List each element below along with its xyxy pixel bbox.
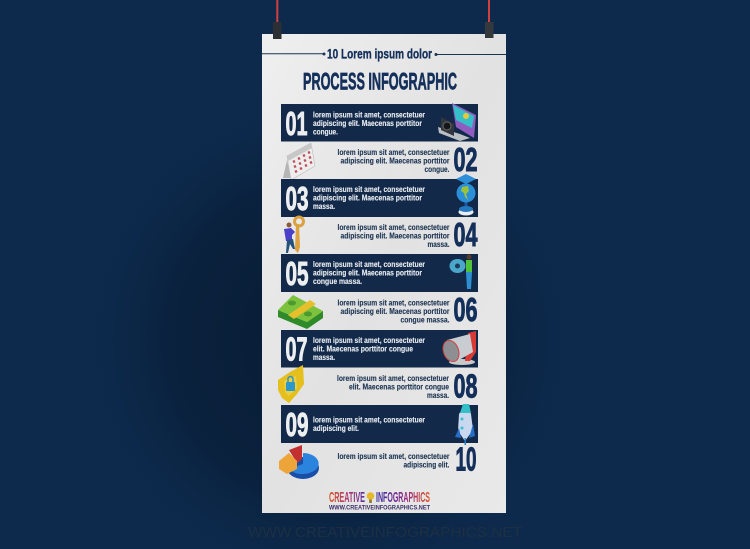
step 05: 05 — [286, 255, 308, 292]
step 09: 09 — [286, 406, 308, 443]
step 08: elit. Maecenas porttitor congue — [349, 382, 449, 392]
step 02: 02 — [454, 141, 478, 178]
step 01: congue. — [313, 128, 338, 136]
step 03: adipiscing elit. Maecenas porttitor — [313, 194, 422, 202]
step 07: massa. — [313, 353, 335, 362]
step 01: lorem ipsum sit amet, consectetuer — [313, 110, 425, 120]
step 03: 03 — [286, 180, 308, 217]
step 07: elit. Maecenas porttitor congue — [313, 344, 413, 354]
subtitle — [262, 46, 506, 62]
step 08 — [278, 365, 478, 404]
step 02 — [283, 141, 478, 180]
logo: CREATIVE — [329, 489, 365, 506]
step 07: 07 — [286, 330, 308, 368]
footer watermark: WWW.CREATIVEINFOGRAPHICS.NET — [248, 524, 522, 541]
step 07 — [281, 330, 478, 368]
hanging clips — [273, 0, 494, 39]
icon: shield with lock — [278, 365, 304, 403]
icon: pie chart — [279, 445, 319, 479]
step 04 — [284, 216, 478, 253]
step 06: lorem ipsum sit amet, consectetuer — [338, 298, 450, 308]
step 04: adipiscing elit. Maecenas porttitor — [340, 232, 450, 240]
step 06: 06 — [454, 291, 478, 328]
step 05: lorem ipsum sit amet, consectetuer — [313, 260, 425, 269]
icon: person with key — [284, 217, 304, 253]
icon: globe with graduation cap — [456, 174, 476, 216]
text: INFOGRAPHICS — [376, 489, 430, 506]
icon: megaphone — [440, 331, 476, 365]
subtitle: 10 Lorem ipsum dolor — [327, 46, 432, 62]
icon: light bulb — [367, 492, 374, 503]
step 02: lorem ipsum sit amet, consectetuer — [338, 148, 450, 157]
step 02: adipiscing elit. Maecenas porttitor — [340, 156, 450, 166]
title: PROCESS INFOGRAPHIC — [303, 68, 457, 96]
step 10: adipiscing elit. — [404, 460, 450, 470]
step 05: congue massa. — [313, 277, 362, 286]
icon: calendar — [283, 143, 315, 180]
step 01 — [281, 103, 478, 142]
icon: rocket — [455, 404, 475, 445]
logo: WWW.CREATIVEINFOGRAPHICS.NET — [329, 506, 430, 512]
icon: camera and picture — [438, 103, 476, 141]
poster sheet — [262, 34, 506, 513]
step 10: lorem ipsum sit amet, consectetuer — [338, 452, 450, 461]
step 10: 10 — [456, 440, 476, 478]
step 10 — [279, 440, 476, 479]
logo — [329, 489, 430, 512]
step 09: lorem ipsum sit amet, consectetuer — [313, 416, 425, 424]
step 07: lorem ipsum sit amet, consectetuer — [313, 336, 425, 345]
step 06 — [278, 291, 478, 329]
step 03 — [281, 174, 478, 217]
step 08: massa. — [427, 391, 449, 400]
step 04: massa. — [428, 240, 450, 249]
icon: stack of money — [278, 295, 323, 329]
step 09: adipiscing elit. — [313, 424, 359, 433]
icon: person with film reel — [450, 254, 472, 289]
step 08: 08 — [454, 368, 478, 404]
step 03: massa. — [313, 202, 335, 211]
step 09 — [281, 404, 478, 445]
step 03: lorem ipsum sit amet, consectetuer — [313, 185, 425, 194]
step 01: 01 — [286, 105, 308, 142]
step 05 — [281, 254, 478, 292]
step 01: adipiscing elit. Maecenas porttitor — [313, 119, 422, 128]
step 06: adipiscing elit. Maecenas porttitor — [340, 307, 450, 316]
step 06: congue massa. — [400, 316, 450, 324]
step 02: congue. — [424, 165, 450, 174]
step 08: lorem ipsum sit amet, consectetuer — [337, 374, 449, 383]
step 04: lorem ipsum sit amet, consectetuer — [338, 223, 450, 232]
step 05: adipiscing elit. Maecenas porttitor — [313, 268, 422, 278]
step 04: 04 — [454, 216, 478, 253]
